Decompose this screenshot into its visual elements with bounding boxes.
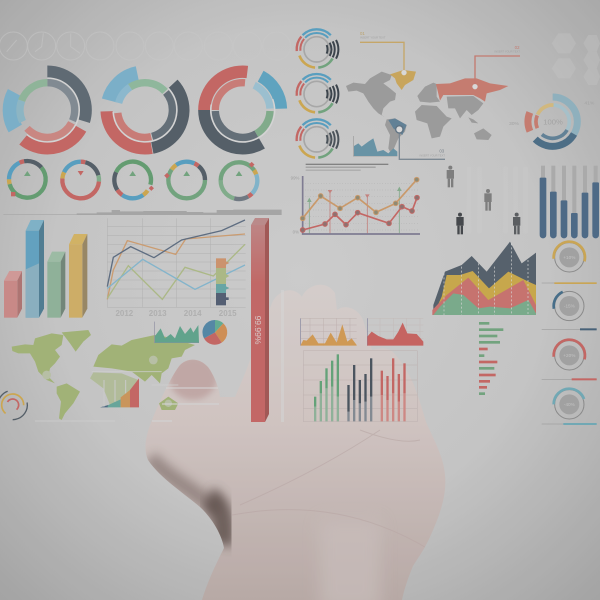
pale stripes <box>35 372 178 421</box>
100% donut: 100% <box>543 117 563 126</box>
tall red bar 99.99%: 99.99% <box>253 316 263 345</box>
callout 02 <box>472 45 520 89</box>
hand <box>140 280 450 600</box>
gauge +10% <box>542 240 597 284</box>
red series <box>300 195 419 232</box>
callout 03 <box>396 126 445 159</box>
gauge -40% <box>542 389 597 425</box>
markers <box>309 190 399 233</box>
small ring 5 <box>213 155 265 207</box>
small ring 3 <box>107 154 158 206</box>
100% donut: 41% <box>584 101 595 107</box>
pale bars on hand <box>152 290 284 422</box>
small ring 2 <box>56 156 105 204</box>
donut 2 <box>91 56 199 164</box>
faint clock circles <box>0 32 291 60</box>
pie chart <box>202 320 227 345</box>
dotted grid <box>305 183 418 230</box>
person 2 <box>484 189 492 211</box>
bar: yellow <box>69 234 87 318</box>
panel: people pictogram <box>447 166 528 234</box>
panel: green world map <box>12 330 195 421</box>
bar: blue <box>26 220 44 318</box>
greenland highlight <box>390 70 416 90</box>
gauge -15%: -15% <box>564 304 575 309</box>
stacked legend column <box>216 258 229 305</box>
axes <box>303 176 420 234</box>
donut 1 <box>0 58 99 162</box>
year labels: 2014 <box>184 309 202 318</box>
small ring 1 <box>2 154 53 205</box>
callout 03: INSERT YOUR TEXT <box>419 154 445 158</box>
100% donut <box>509 88 595 155</box>
map node rings <box>42 356 172 407</box>
100% donut: 30% <box>509 121 520 127</box>
red area chart <box>367 318 423 346</box>
gauge -40%: -40% <box>564 402 575 407</box>
gauge 2 <box>288 66 345 122</box>
faint people columns <box>467 167 528 233</box>
candlestick grid <box>303 351 417 422</box>
russia highlight <box>436 78 508 102</box>
year labels <box>115 309 237 318</box>
small ring 4 <box>161 154 212 206</box>
gauge 1 <box>288 21 345 78</box>
south america <box>57 383 80 420</box>
greenland <box>62 330 91 352</box>
person 3 <box>456 213 464 234</box>
bar: red <box>4 271 22 318</box>
year labels: 2015 <box>219 309 237 318</box>
orange area chart <box>301 318 357 346</box>
callout 01 <box>360 31 407 75</box>
series lines <box>107 234 245 299</box>
histogram strip <box>3 210 282 215</box>
panel: donut charts and rings <box>0 32 295 215</box>
grid <box>107 218 246 307</box>
blue area chart <box>353 136 397 156</box>
year labels: 2013 <box>149 309 167 318</box>
continents <box>346 72 492 152</box>
panel: three segmented gauges <box>288 21 345 168</box>
gauge -15% <box>542 288 597 330</box>
africa <box>90 372 138 405</box>
red columns <box>381 358 406 421</box>
panel: dot line chart: 99% <box>291 175 299 180</box>
callout 01: 01 <box>360 31 365 36</box>
bars <box>540 178 599 235</box>
mini green area chart <box>154 322 199 343</box>
callout 03: 03 <box>439 149 445 154</box>
tracks <box>541 166 598 235</box>
donut 3 <box>190 58 295 162</box>
australia <box>159 397 178 410</box>
mountain chart <box>432 242 536 315</box>
brazil highlight <box>388 118 407 135</box>
panel: map callouts and extras <box>353 31 600 159</box>
dark columns <box>347 358 372 421</box>
orange series <box>300 177 419 221</box>
faint hexagons <box>552 33 600 85</box>
panel: 3D bar chart <box>4 220 87 318</box>
gauge +20%: +20% <box>563 353 575 358</box>
gauge 3 <box>288 111 345 168</box>
panel: gray world map with callouts <box>346 70 508 152</box>
bar: green <box>47 252 65 318</box>
heading rules <box>306 164 388 171</box>
callout 02: INSERT YOUR TEXT <box>494 50 520 54</box>
callout 02: 02 <box>515 45 520 50</box>
panel: dot line chart: 0% <box>293 229 299 234</box>
mini area chart and pie <box>154 320 227 345</box>
north america <box>12 333 63 383</box>
gauge +20% <box>542 338 597 380</box>
year labels: 2012 <box>115 309 134 318</box>
tall red bar 99.99% <box>251 218 269 422</box>
panel: blue vertical bars <box>540 166 599 238</box>
panel: dot line chart <box>291 164 420 234</box>
horizontal bars <box>479 322 503 395</box>
small stacked area chart <box>100 378 139 407</box>
person 1 <box>447 166 454 187</box>
person 4 <box>513 213 520 234</box>
panel: line chart <box>107 218 246 318</box>
callout 01: INSERT YOUR TEXT <box>360 36 386 40</box>
icon: concentric arcs <box>0 388 30 422</box>
green columns <box>314 354 339 421</box>
gauge +10%: +10% <box>563 255 575 260</box>
eurasia <box>93 335 195 383</box>
panel: lower right charts <box>301 240 597 425</box>
